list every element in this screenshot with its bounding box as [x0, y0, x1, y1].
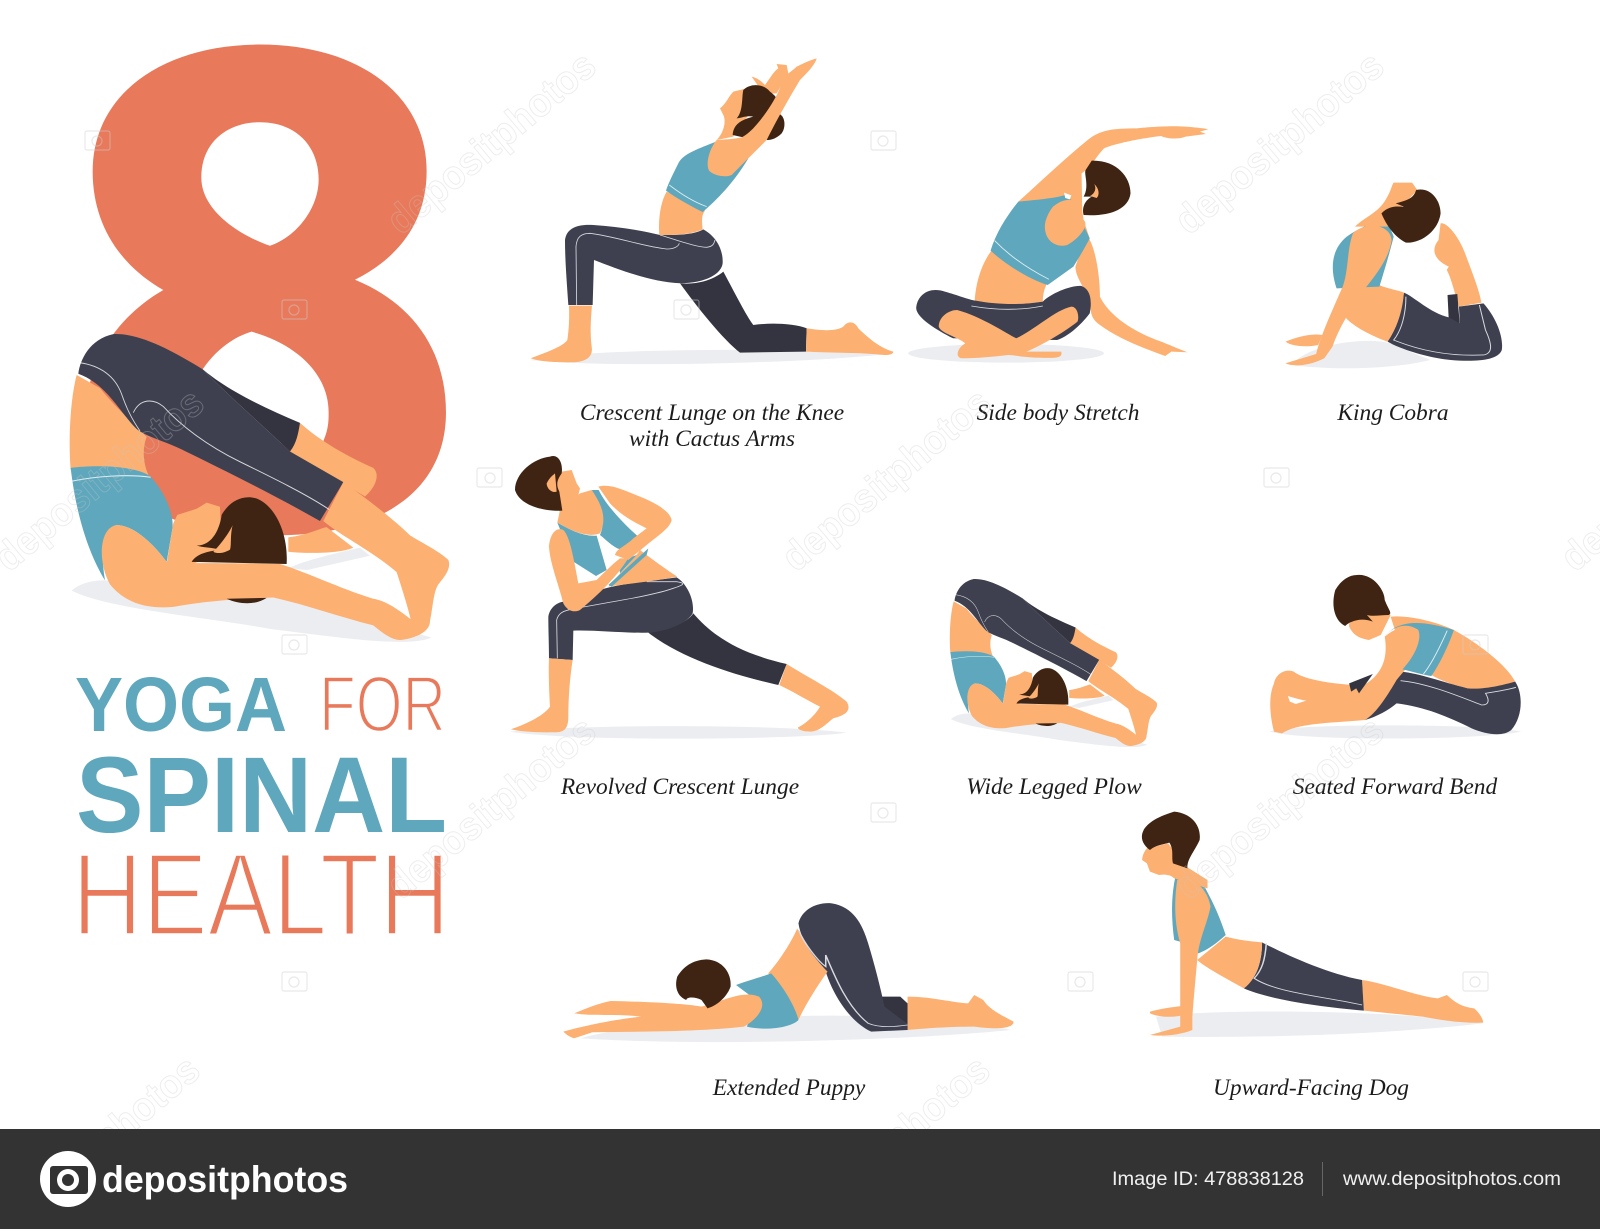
- title word: SPINAL: SPINAL: [76, 734, 447, 855]
- pose: revolved crescent lunge: [510, 456, 849, 739]
- footer logo icon: camera: [40, 1151, 96, 1207]
- footer image id: Image ID: 478838128: [1112, 1169, 1304, 1190]
- watermarks: depositphotos: [774, 380, 999, 580]
- pose: extended puppy: [563, 903, 1014, 1042]
- caption: seated forward bend: Seated Forward Bend: [1293, 774, 1498, 800]
- caption: crescent lunge: with Cactus Arms: [629, 426, 795, 452]
- watermark camera icons: [85, 131, 1488, 991]
- caption: revolved crescent lunge: Revolved Crescent Lunge: [560, 774, 799, 800]
- footer logo wordmark: depositphotos: [102, 1159, 348, 1200]
- watermarks: depositphotos: [379, 708, 604, 908]
- large number 8: [87, 45, 446, 535]
- title word: YOGA: YOGA: [75, 662, 287, 748]
- pose: upward-facing dog: [1142, 812, 1483, 1037]
- caption: extended puppy: Extended Puppy: [712, 1075, 866, 1101]
- title word: FOR: FOR: [319, 659, 446, 748]
- title: yoga for spinal health: [72, 659, 450, 961]
- caption: wide legged plow: Wide Legged Plow: [966, 774, 1142, 800]
- caption: crescent lunge: Crescent Lunge on the Knee: [580, 400, 844, 426]
- footer bar: [0, 1129, 1600, 1229]
- caption: upward-facing dog: Upward-Facing Dog: [1213, 1075, 1409, 1101]
- caption: side body stretch: Side body Stretch: [977, 400, 1139, 426]
- watermarks: depositphotos: [1167, 708, 1392, 908]
- pose: king cobra: [1286, 183, 1502, 368]
- pose: side body stretch: [908, 126, 1208, 363]
- main figure: plow pose: [70, 334, 449, 642]
- pose: seated forward bend: [1270, 575, 1521, 739]
- watermarks: depositphotos: [379, 43, 604, 243]
- watermarks: depositphotos: [1167, 43, 1392, 243]
- caption: king cobra: King Cobra: [1336, 400, 1449, 426]
- footer website url: www.depositphotos.com: [1342, 1169, 1561, 1190]
- pose: crescent lunge on the knee with cactus arms: [530, 58, 893, 364]
- pose: wide legged plow: [950, 579, 1157, 747]
- title word: HEALTH: HEALTH: [72, 829, 450, 961]
